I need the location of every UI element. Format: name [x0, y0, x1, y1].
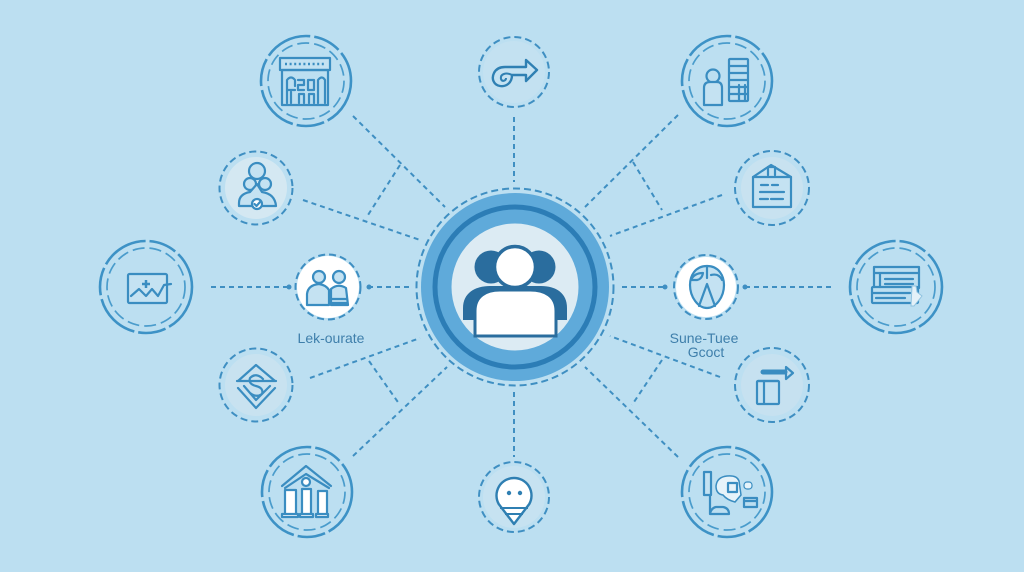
node: right lower arrow box: [735, 348, 809, 422]
label: right: Sune-Tuee: [670, 330, 739, 346]
icon: mask: [690, 266, 724, 308]
node: top centre arrow: [479, 37, 549, 107]
icon: group of people: [463, 246, 567, 336]
label: right: [670, 330, 739, 360]
icon: person and document: [704, 59, 748, 105]
node: left upper people: [220, 152, 292, 224]
connector lines: [211, 115, 835, 457]
icon: window and card: [872, 267, 922, 306]
icon: two people: [307, 271, 348, 305]
icon: folder document: [753, 165, 791, 207]
icon: line chart: [128, 274, 171, 303]
node: bottom right device: [682, 447, 772, 537]
label: right: Gcoct: [688, 344, 724, 360]
node: far right card: [850, 241, 942, 333]
icon: temple: [282, 466, 331, 517]
node: left lower emblem: [220, 348, 292, 422]
icon: building: [280, 58, 330, 105]
icon: curled arrow: [493, 60, 537, 86]
node: far left chart: [100, 241, 192, 333]
node: near left people: [296, 254, 360, 320]
node: near right mask: [674, 255, 738, 319]
icon: diamond knot: [237, 365, 276, 408]
node: bottom centre face pin: [479, 462, 549, 532]
icon: arrow and box: [757, 367, 793, 404]
central hub: [416, 188, 614, 386]
node: right upper envelope: [735, 151, 809, 225]
node: bottom left temple: [262, 447, 352, 537]
icon: face pin: [496, 478, 531, 524]
node: top right person with document: [682, 36, 772, 126]
icon: people with check: [239, 163, 276, 209]
icon: device: [704, 472, 757, 514]
label: left: Lek-ourate: [298, 330, 365, 346]
node: top left building: [261, 36, 351, 126]
